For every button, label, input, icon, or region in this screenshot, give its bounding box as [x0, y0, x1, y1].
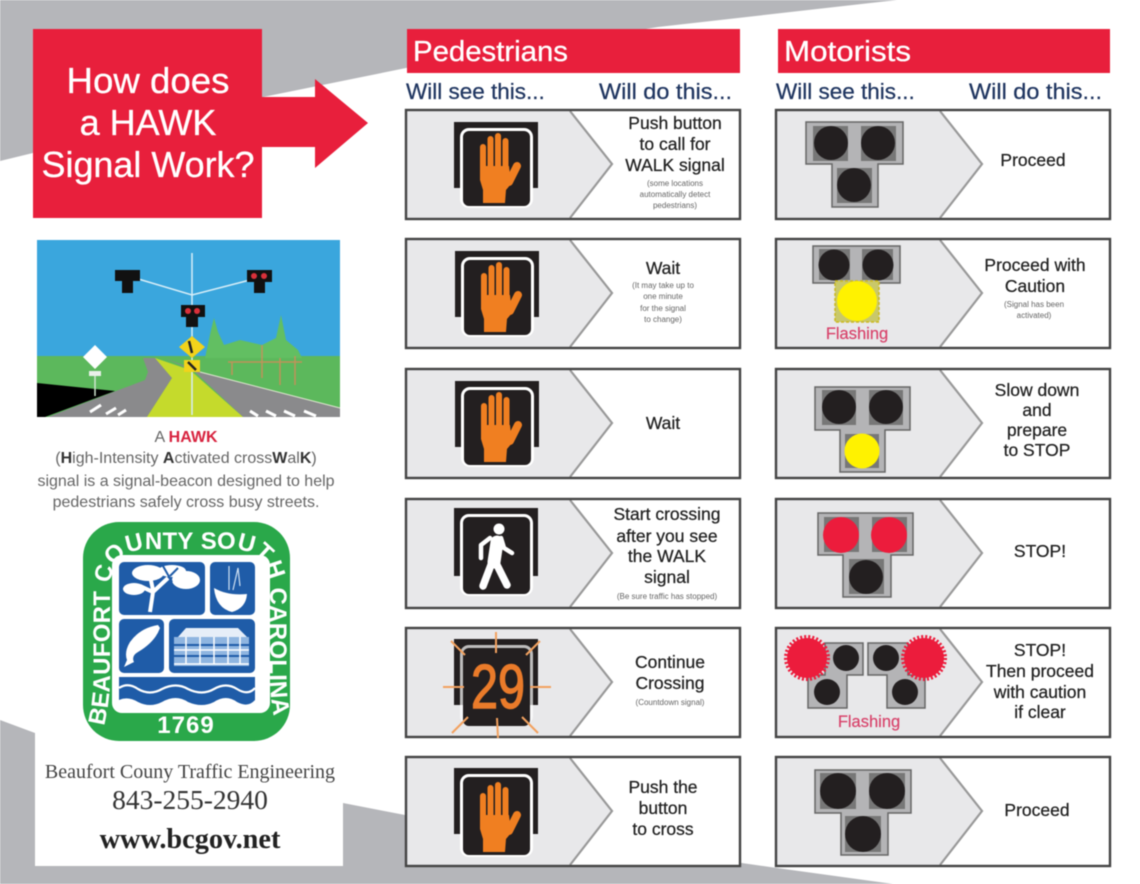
icon: orange hand: [455, 381, 539, 467]
instruction text: [995, 380, 1079, 460]
instruction text: [614, 504, 720, 601]
description text: [37, 429, 335, 511]
instruction text: [625, 113, 725, 210]
instruction text: Proceed with: [984, 255, 1086, 275]
seal panel: shrimp boat: [210, 562, 255, 615]
panel: motorist step 6: [776, 757, 1110, 866]
contact text: [45, 761, 335, 855]
instruction text: Crossing: [635, 673, 705, 693]
instruction text: automatically detect: [640, 190, 711, 199]
panel: pedestrian step 4: [406, 499, 740, 608]
column labels: motorists: Will do this...: [969, 79, 1102, 104]
instruction text: WALK signal: [625, 155, 725, 175]
instruction text: Start crossing: [614, 504, 720, 524]
instruction text: the WALK: [628, 546, 706, 566]
instruction text: Proceed: [1000, 150, 1066, 170]
icon: steady yellow signal: [815, 387, 910, 472]
label: Flashing: Flashing: [838, 713, 900, 731]
instruction text: to call for: [640, 134, 711, 154]
icon: countdown 29: 29: [471, 653, 525, 722]
description text: (High-Intensity Activated crossWalK): [55, 450, 317, 467]
instruction text: Continue: [635, 652, 705, 672]
instruction text: prepare: [1007, 420, 1067, 440]
icon: dark signal: [815, 770, 911, 855]
icon: dark signal: [806, 122, 903, 207]
instruction text: STOP!: [1014, 640, 1066, 660]
panel: pedestrian step 5: [406, 628, 740, 738]
title callout with arrow: a HAWK: [80, 102, 216, 143]
icon: flashing red signal pair: [786, 637, 945, 708]
title callout with arrow: How does: [66, 60, 230, 101]
title callout with arrow: Signal Work?: [42, 144, 254, 185]
panel: motorist step 1: [776, 110, 1110, 219]
instruction text: signal: [644, 567, 690, 587]
title callout with arrow: [33, 29, 368, 218]
instruction text: button: [639, 798, 687, 818]
instruction text: [628, 777, 698, 839]
instruction text: Wait: [646, 258, 680, 278]
instruction text: Wait: [646, 413, 680, 433]
description text: A HAWK: [154, 429, 218, 446]
instruction text: pedestrians): [653, 201, 697, 210]
instruction text: (It may take up to: [632, 281, 694, 290]
instruction text: to STOP: [1004, 440, 1070, 460]
instruction text: activated): [1017, 311, 1052, 320]
contact text: 843-255-2940: [112, 784, 268, 815]
instruction text: to change): [644, 315, 682, 324]
panel: motorist step 3: [776, 369, 1110, 478]
contact text: www.bcgov.net: [100, 824, 281, 855]
panel: pedestrian step 3: [406, 369, 740, 478]
instruction text: with caution: [993, 682, 1086, 702]
panel: motorist step 2: [776, 239, 1110, 348]
instruction text: one minute: [643, 292, 683, 301]
heading: Motorists: Motorists: [784, 36, 911, 68]
column labels: motorists: [776, 79, 1102, 104]
heading: Pedestrians: Pedestrians: [413, 36, 568, 68]
instruction text: STOP!: [1014, 541, 1066, 561]
instruction text: [635, 652, 705, 707]
seal panel: water: [119, 677, 255, 705]
instruction text: after you see: [616, 526, 718, 546]
instruction text: [986, 640, 1094, 722]
instruction text: Proceed: [1004, 800, 1070, 820]
heading: Motorists: [778, 29, 1110, 73]
Beaufort County seal logo: 1769: [157, 712, 215, 739]
label: Flashing: Flashing: [826, 325, 888, 343]
column labels: motorists: Will see this...: [776, 79, 915, 104]
instruction text: (Be sure traffic has stopped): [617, 592, 718, 601]
instruction text: (Countdown signal): [636, 698, 705, 707]
description text: signal is a signal-beacon designed to help: [37, 473, 335, 490]
instruction text: Push the: [628, 777, 698, 797]
contact text: Beaufort Couny Traffic Engineering: [45, 761, 335, 783]
panel: motorist step 4: [776, 499, 1110, 608]
instruction text: Caution: [1005, 276, 1065, 296]
instruction text: if clear: [1014, 702, 1066, 722]
icon: countdown 29: [443, 632, 551, 738]
instruction text: to cross: [632, 819, 694, 839]
icon: orange hand: [454, 122, 538, 208]
instruction text: (Signal has been: [1004, 300, 1064, 309]
icon: white walking figure: [454, 508, 538, 596]
seal panel: building: [169, 619, 255, 673]
icon: orange hand: [455, 251, 539, 337]
panel: motorist step 5: [776, 628, 1110, 737]
icon: orange hand: [454, 768, 538, 857]
panel: pedestrian step 2: [406, 239, 740, 348]
Beaufort County seal logo: BEAUFORT COUNTY SOUTH CAROLINA: [88, 531, 290, 726]
instruction text: [984, 255, 1086, 320]
instruction text: for the signal: [640, 304, 686, 313]
heading: Pedestrians: [407, 29, 740, 73]
seal panel: fish: [119, 619, 164, 673]
instruction text: [632, 258, 694, 324]
instruction text: Then proceed: [986, 661, 1094, 681]
column labels: pedestrians: Will do this...: [599, 79, 732, 104]
instruction text: Push button: [628, 113, 722, 133]
icon: flashing yellow signal: [813, 246, 900, 322]
instruction text: Slow down: [995, 380, 1079, 400]
panel: pedestrian step 1: [406, 110, 740, 219]
column labels: pedestrians: [406, 79, 732, 104]
instruction text: and: [1022, 400, 1052, 420]
instruction text: (some locations: [647, 179, 703, 188]
icon: steady red signal: [818, 513, 913, 597]
seal panel: tree: [119, 562, 205, 615]
panel: pedestrian step 6: [406, 757, 740, 866]
description text: pedestrians safely cross busy streets.: [53, 494, 319, 511]
column labels: pedestrians: Will see this...: [406, 79, 545, 104]
illustration: HAWK signal at a crossing: [37, 240, 340, 417]
